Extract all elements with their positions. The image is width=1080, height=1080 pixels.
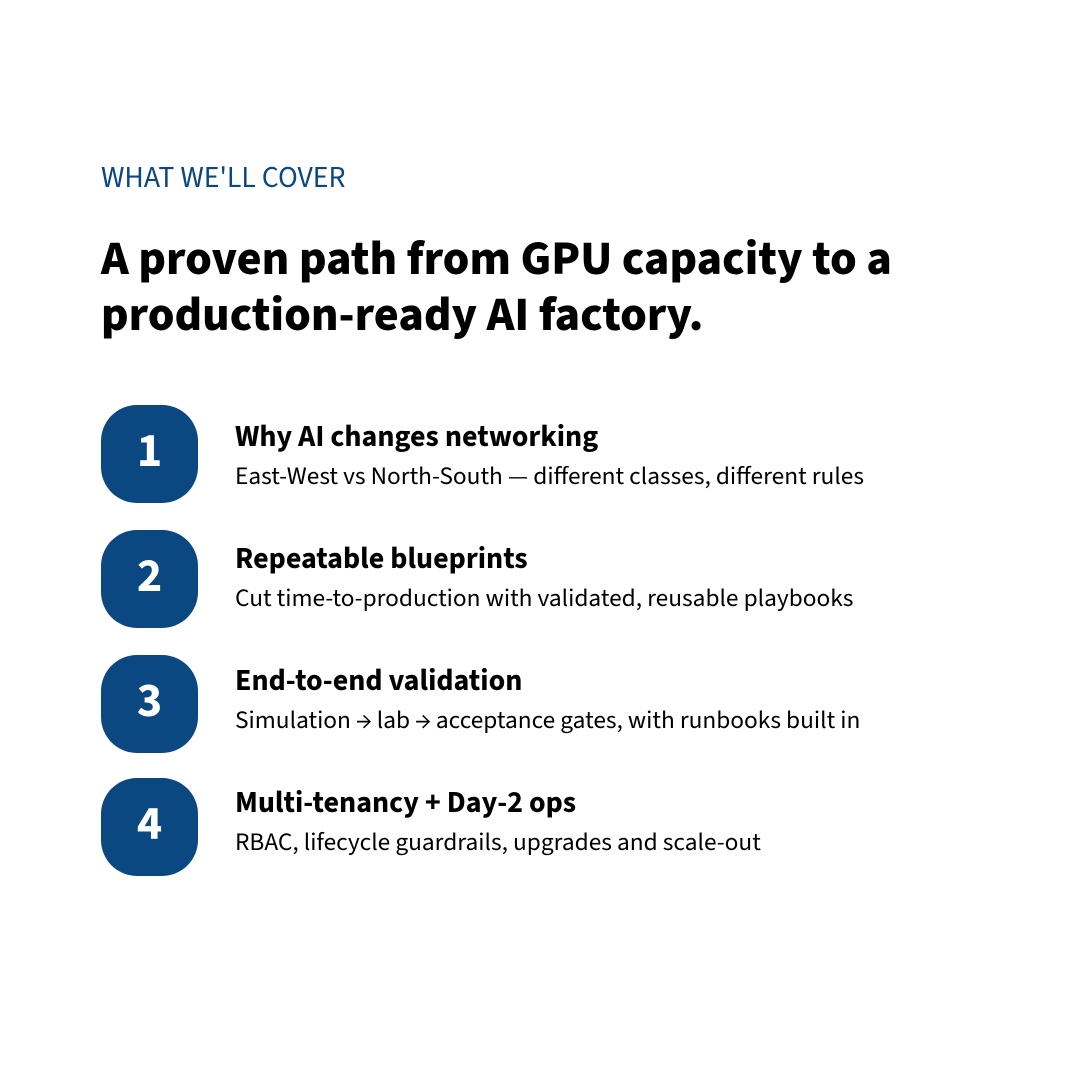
- badge 1: 1: [137, 418, 162, 486]
- title: A proven path from GPU capacity to a: [101, 226, 892, 294]
- badge 4: 4: [137, 791, 162, 859]
- item 1 description: East-West vs North-South — different classes, different rules: [235, 459, 864, 495]
- item 1 heading: Why AI changes networking: [235, 415, 598, 458]
- item 2 heading: Repeatable blueprints: [235, 537, 528, 580]
- title: production-ready AI factory.: [101, 282, 703, 350]
- item 4 description: RBAC, lifecycle guardrails, upgrades and scale-out: [235, 825, 761, 861]
- item 3 description: Simulation → lab → acceptance gates, with runbooks built in: [235, 703, 860, 739]
- title: [100, 226, 892, 350]
- item 2 description: Cut time-to-production with validated, reusable playbooks: [235, 581, 853, 617]
- badge 2: 2: [137, 543, 162, 611]
- badge 4: [101, 778, 198, 876]
- badge 3: 3: [137, 668, 162, 736]
- item 3 heading: End-to-end validation: [235, 659, 522, 702]
- badge 2: [101, 530, 198, 628]
- item 4 heading: Multi-tenancy + Day-2 ops: [235, 781, 576, 824]
- eyebrow heading: WHAT WE'LL COVER: [101, 156, 345, 199]
- badge 1: [101, 405, 198, 503]
- badge 3: [101, 655, 198, 753]
